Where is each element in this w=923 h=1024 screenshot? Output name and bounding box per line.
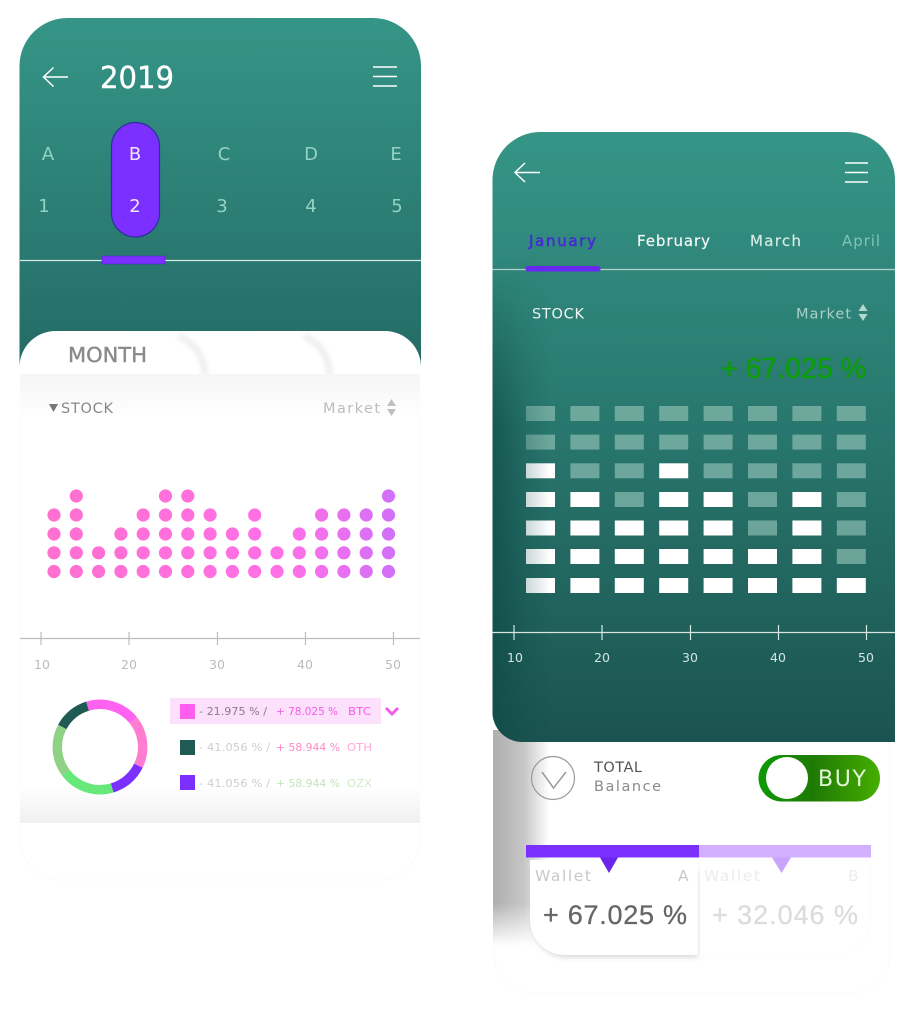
wallet B labels: Wallet <box>704 867 760 885</box>
wallet B labels: B <box>848 867 859 885</box>
number row <box>38 196 403 217</box>
bar grid inactive <box>526 406 866 564</box>
menu icon <box>845 163 868 182</box>
panel: left phone screen <box>20 18 421 880</box>
right axis: 50 <box>858 650 874 665</box>
buy toggle <box>758 755 880 802</box>
wallet bars <box>526 845 871 873</box>
right axis: 10 <box>507 650 523 665</box>
legend row BTC: - 21.975 % / <box>199 705 267 718</box>
month tabs: April <box>842 232 880 250</box>
wallet A card <box>530 860 698 957</box>
wallet B labels <box>704 867 859 885</box>
legend row OZX <box>180 775 372 790</box>
legend row OTH: + 58.944 % <box>276 741 340 754</box>
letter row: B <box>129 144 141 165</box>
right axis <box>492 625 895 665</box>
header divider <box>20 260 421 262</box>
lower body shading <box>20 786 420 823</box>
back arrow <box>514 163 540 182</box>
month tabs: January <box>528 232 596 250</box>
dot chart <box>47 489 395 578</box>
letter row: A <box>42 144 55 165</box>
left axis <box>20 632 420 672</box>
month tabs: March <box>750 232 801 250</box>
letter row <box>42 144 402 165</box>
left teal header <box>20 18 421 367</box>
month tab label: MONTH <box>68 343 147 367</box>
number row: 5 <box>391 196 403 217</box>
wallet A labels: A <box>678 867 689 885</box>
month tabs <box>528 232 880 250</box>
legend row BTC: + 78.025 % <box>276 705 338 718</box>
number row: 1 <box>38 196 50 217</box>
active month marker <box>526 266 600 272</box>
letter row: D <box>304 144 318 165</box>
side shadow <box>493 730 546 942</box>
wallet B card <box>700 860 870 955</box>
left axis: 20 <box>121 657 137 672</box>
right teal header <box>492 132 895 742</box>
wallet B value: + 32.046 % <box>712 900 858 930</box>
menu icon <box>373 67 397 86</box>
number row: 3 <box>216 196 228 217</box>
letter row: E <box>390 144 402 165</box>
legend row OZX: + 58.944 % <box>276 777 340 790</box>
number row: 2 <box>129 196 141 217</box>
legend row BTC <box>170 698 398 724</box>
expand icon <box>532 756 574 800</box>
right screen outline <box>494 700 890 993</box>
left axis: 40 <box>297 657 313 672</box>
left axis: 10 <box>34 657 50 672</box>
panel: right phone screen <box>492 132 895 993</box>
donut chart <box>40 687 160 807</box>
selected column pill <box>112 122 160 237</box>
legend row OTH: OTH <box>347 741 372 754</box>
right axis: 20 <box>594 650 610 665</box>
side shading over chart <box>492 292 546 742</box>
market selector: Market <box>323 401 380 417</box>
stock label: STOCK <box>532 306 584 322</box>
market selector <box>323 399 396 417</box>
market selector: Market <box>796 306 851 322</box>
buy toggle: BUY <box>818 767 867 792</box>
legend row OTH <box>180 740 372 755</box>
wallet A labels: Wallet <box>535 867 591 885</box>
total balance label: TOTAL <box>593 760 642 776</box>
legend row OTH: - 41.056 % / <box>199 741 270 754</box>
year heading: 2019 <box>100 61 174 96</box>
letter row: C <box>218 144 230 165</box>
back arrow <box>43 68 68 86</box>
selection marker <box>102 256 165 264</box>
number row: 4 <box>305 196 317 217</box>
market selector <box>796 304 868 322</box>
wallet A labels <box>535 867 689 885</box>
wallet A value: + 67.025 % <box>543 900 687 930</box>
tabs divider <box>492 268 895 270</box>
left screen outline <box>20 200 420 880</box>
stock label: STOCK <box>61 401 113 417</box>
legend row BTC: BTC <box>348 705 371 718</box>
left axis: 30 <box>209 657 225 672</box>
white card with tabs <box>20 331 421 376</box>
bar grid active <box>526 463 866 593</box>
stock gain value: + 67.025 % <box>721 353 866 385</box>
right axis: 30 <box>682 650 698 665</box>
total balance label: Balance <box>594 779 661 795</box>
body top shading <box>20 374 420 418</box>
total balance label <box>593 760 661 795</box>
legend row OZX: - 41.056 % / <box>199 777 270 790</box>
legend row OZX: OZX <box>347 777 372 790</box>
right axis: 40 <box>770 650 786 665</box>
month tabs: February <box>637 232 710 250</box>
left axis: 50 <box>385 657 401 672</box>
